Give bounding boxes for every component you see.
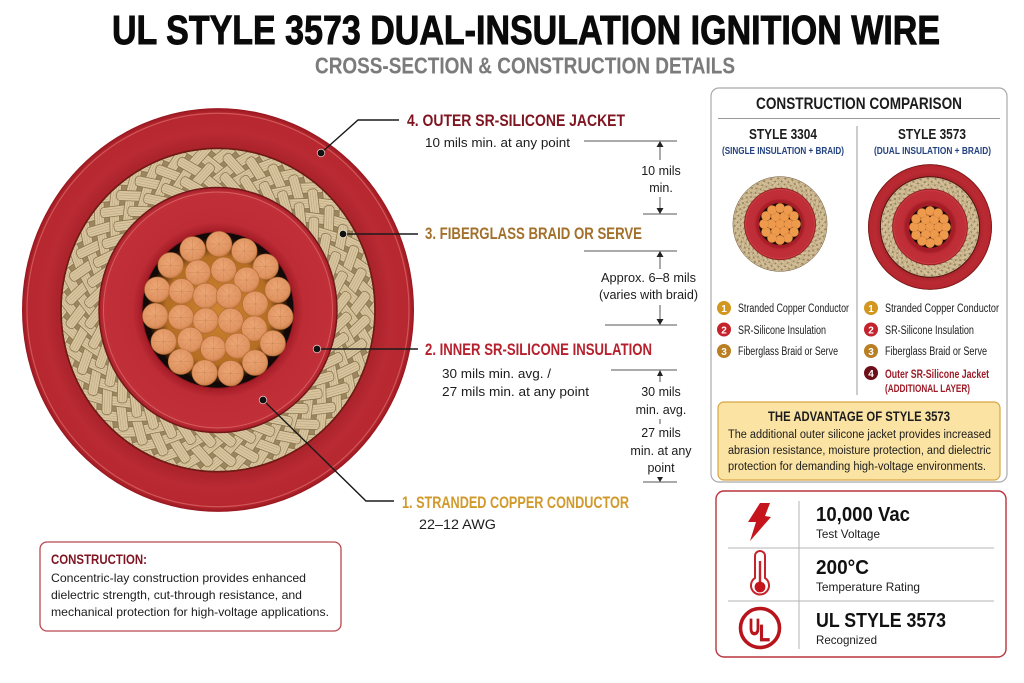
leader line: copper conductor <box>259 396 394 501</box>
column: style 3304: Stranded Copper Conductor <box>738 303 849 315</box>
rating: UL recognition: Recognized <box>816 633 877 647</box>
dimension: insulation thickness: 30 mils <box>641 385 681 399</box>
icon: UL mark: U <box>749 614 760 640</box>
dimension: insulation thickness: 27 mils <box>641 426 681 440</box>
panel: construction note: CONSTRUCTION: <box>51 552 147 567</box>
dimension: braid thickness <box>584 251 698 325</box>
panel: construction note: dielectric strength, cut-through resistance, and <box>51 588 302 602</box>
rating: temperature <box>816 556 920 594</box>
icon: UL mark <box>740 608 780 648</box>
column: style 3304: (SINGLE INSULATION + BRAID) <box>722 145 844 157</box>
rating: temperature: 200°C <box>816 556 869 579</box>
column: style 3573: Fiberglass Braid or Serve <box>885 346 987 358</box>
label: inner insulation: 30 mils min. avg. / <box>442 366 551 381</box>
column: style 3573: SR-Silicone Insulation <box>885 325 974 337</box>
label: outer jacket <box>407 112 625 150</box>
dimension: outer jacket thickness: min. <box>649 181 673 195</box>
leader line: fiberglass braid <box>339 230 418 238</box>
cable cross-section diagram <box>13 98 423 522</box>
label: inner insulation <box>425 341 652 399</box>
panel: construction note: mechanical protection for high-voltage applications. <box>51 605 329 619</box>
dimension: insulation thickness: point <box>647 461 675 475</box>
column: style 3573 <box>864 127 999 395</box>
panel: construction comparison <box>711 88 1007 482</box>
label: inner insulation: 27 mils min. at any point <box>442 384 589 399</box>
label: outer jacket: 4. OUTER SR-SILICONE JACKET <box>407 112 625 130</box>
column: style 3304: Fiberglass Braid or Serve <box>738 346 838 358</box>
label: inner insulation: 2. INNER SR-SILICONE INSULATION <box>425 341 652 359</box>
column: style 3304: SR-Silicone Insulation <box>738 325 826 337</box>
label: copper conductor: 1. STRANDED COPPER CONDUCTOR <box>402 494 629 512</box>
callout: advantage of style 3573: The additional outer silicone jacket provides increased <box>728 429 991 441</box>
column: style 3573: 1 <box>868 304 874 315</box>
rating: UL recognition: UL STYLE 3573 <box>816 609 946 632</box>
rating: test voltage <box>816 503 910 541</box>
dimension: outer jacket thickness <box>584 141 681 214</box>
column: style 3573: (DUAL INSULATION + BRAID) <box>874 145 991 157</box>
leader line: outer jacket <box>317 120 399 157</box>
icon: UL mark: L <box>759 620 770 646</box>
icon: thermometer <box>751 551 769 594</box>
dimension: insulation thickness <box>611 370 692 482</box>
column: style 3573: Outer SR-Silicone Jacket <box>885 369 989 381</box>
column: style 3304: STYLE 3304 <box>749 127 817 143</box>
column: style 3573: STYLE 3573 <box>898 127 966 143</box>
rating: temperature: Temperature Rating <box>816 580 920 594</box>
column: style 3304: 3 <box>721 347 727 358</box>
rating: UL recognition <box>816 609 946 647</box>
label: copper conductor <box>402 494 629 532</box>
column: style 3573: 4 <box>868 369 874 380</box>
label: outer jacket: 10 mils min. at any point <box>425 135 570 150</box>
comparison heading: CONSTRUCTION COMPARISON <box>756 95 962 113</box>
column: style 3573: (ADDITIONAL LAYER) <box>885 383 970 395</box>
panel: construction note: Concentric-lay construction provides enhanced <box>51 571 306 585</box>
label: copper conductor: 22–12 AWG <box>419 517 496 532</box>
column: style 3304: 1 <box>721 304 727 315</box>
column: style 3304 <box>717 127 849 358</box>
column: style 3304: 2 <box>721 326 727 336</box>
column: style 3573: 2 <box>868 326 874 336</box>
dimension: insulation thickness: min. avg. <box>636 403 686 417</box>
callout: advantage of style 3573 <box>718 402 1000 480</box>
icon: lightning bolt <box>748 503 771 541</box>
callout: advantage of style 3573: THE ADVANTAGE OF STYLE 3573 <box>768 408 950 424</box>
dimension: outer jacket thickness: 10 mils <box>641 164 681 178</box>
column: style 3573: 3 <box>868 347 874 358</box>
callout: advantage of style 3573: abrasion resistance, moisture protection, and dielectric <box>728 445 991 457</box>
leader line: inner insulation <box>313 345 418 353</box>
dimension: insulation thickness: min. at any <box>630 444 692 458</box>
label: fiberglass braid: 3. FIBERGLASS BRAID OR SERVE <box>425 225 642 243</box>
subtitle: CROSS-SECTION & CONSTRUCTION DETAILS <box>315 52 735 78</box>
dimension: braid thickness: (varies with braid) <box>599 288 698 302</box>
dimension: braid thickness: Approx. 6–8 mils <box>601 271 696 285</box>
rating: test voltage: Test Voltage <box>816 527 880 541</box>
panel: construction note <box>40 542 341 631</box>
callout: advantage of style 3573: protection for demanding high-voltage environments. <box>728 461 986 473</box>
rating: test voltage: 10,000 Vac <box>816 503 910 526</box>
panel: key ratings <box>716 491 1006 657</box>
